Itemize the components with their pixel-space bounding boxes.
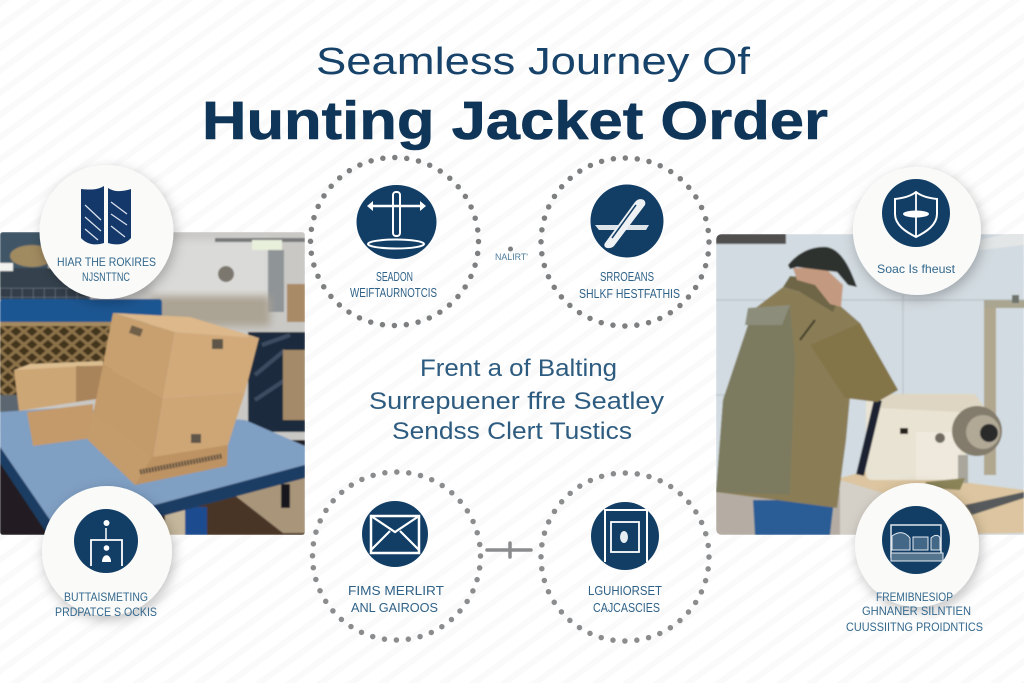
step: bottom left dotted circle: ANL GAIROOS (351, 600, 438, 615)
icon: envelope (362, 501, 428, 567)
icon: open book (81, 186, 131, 244)
icon: machine panel (882, 506, 950, 574)
badge: bottom right (846, 483, 983, 634)
step: top right dotted circle (541, 158, 709, 326)
badge: top left (40, 165, 174, 299)
small stack (14, 363, 103, 411)
step: bottom right dotted circle: LGUHIORSET (588, 583, 662, 598)
step: top right dotted circle: SRROEANS (600, 269, 654, 284)
title: Hunting Jacket Order (202, 91, 828, 151)
central panel (305, 232, 716, 535)
table (0, 408, 305, 520)
step: bottom left dotted circle: FIMS MERLIRT (348, 583, 444, 598)
central text block: Frent a of Balting (420, 355, 617, 382)
head and cap (793, 268, 843, 307)
step: top left dotted circle: WEIFTAURNOTCIS (350, 285, 437, 300)
icon: signpost (356, 185, 436, 259)
badge: bottom right: GHNANER SILNTIEN (862, 604, 971, 618)
badge: bottom left (42, 486, 172, 619)
step: top right dotted circle: SHLKF HESTFATHIS (579, 286, 680, 301)
badge: bottom left: BUTTAISMETING (64, 590, 148, 604)
title: Seamless Journey Of (316, 41, 751, 83)
badge: top left: NJSNTTNC (82, 270, 130, 284)
bottom box (88, 412, 153, 485)
jacket (716, 286, 860, 508)
icon: shield (882, 179, 950, 247)
connector label between top circles (495, 246, 528, 262)
badge: bottom right: FREMIBNESIOP (876, 590, 953, 604)
step: bottom right dotted circle (541, 473, 709, 641)
photo: packed cardboard boxes on a blue table (0, 232, 305, 535)
icon: framed emblem (591, 502, 659, 570)
icon: control tower (74, 509, 138, 573)
step: bottom right dotted circle: CAJCASCIES (593, 600, 660, 615)
jeans (753, 500, 834, 535)
middle box (93, 365, 163, 457)
badge: top left: HIAR THE ROKIRES (57, 255, 156, 269)
central text block: Sendss Clert Tustics (392, 418, 632, 445)
badge: bottom right: CUUSSIITNG PROIDNTICS (846, 620, 983, 634)
table (840, 470, 1024, 535)
title (202, 41, 828, 151)
step: top left dotted circle (310, 158, 478, 326)
machine (866, 396, 966, 480)
badge: top right (853, 167, 981, 295)
top box (103, 313, 175, 398)
connector: bottom circles (487, 543, 531, 557)
central text block (369, 355, 664, 445)
below table (0, 440, 305, 535)
connector label between top circles: NALIRT' (495, 252, 528, 262)
step: top left dotted circle: SEADON (376, 269, 413, 284)
photo: worker in olive jacket at a sewing machine (716, 230, 1024, 535)
icon: needle (590, 184, 664, 258)
badge: bottom left: PRDPATCE S OCKIS (55, 605, 157, 619)
central text block: Surrepuener ffre Seatley (369, 388, 664, 415)
badge: top right: Soac Is fheust (877, 262, 956, 276)
step: bottom left dotted circle (312, 472, 480, 640)
